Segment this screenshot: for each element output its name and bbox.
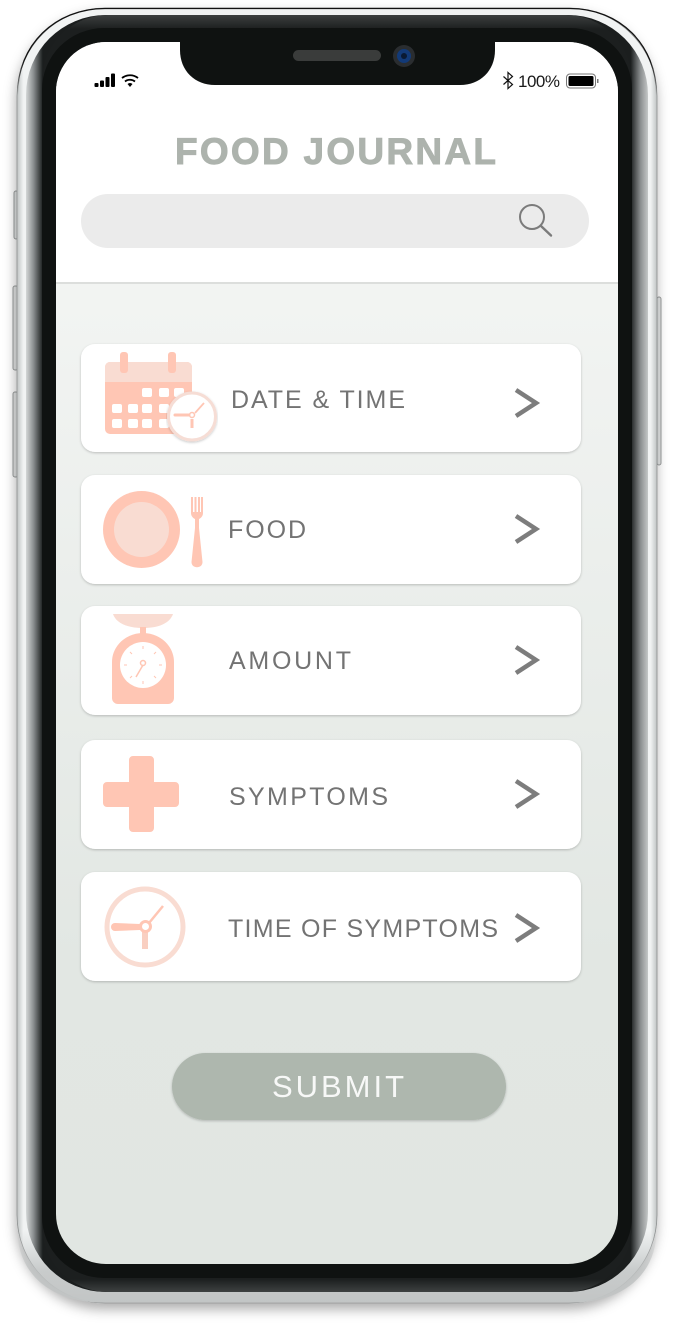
- submit button: SUBMIT: [272, 1069, 404, 1104]
- card: time of symptoms: [81, 872, 581, 981]
- label: FOOD: [228, 516, 306, 544]
- submit button: [172, 1053, 506, 1120]
- arrow: [516, 647, 536, 673]
- status bar right: bluetooth, battery: 100%: [518, 72, 560, 91]
- icon: plate and fork: [103, 491, 203, 568]
- arrow: [516, 781, 536, 807]
- arrow: [516, 516, 536, 542]
- arrow: [516, 390, 536, 416]
- icon: clock: [107, 889, 183, 965]
- icon: kitchen scale: [112, 614, 174, 704]
- notch: [180, 42, 495, 85]
- arrow: [516, 915, 536, 941]
- status bar left: signal and wifi: [94, 74, 138, 87]
- card: amount: [81, 606, 581, 715]
- card: food: [81, 475, 581, 584]
- card: symptoms: [81, 740, 581, 849]
- card: date and time: [81, 344, 581, 452]
- side buttons: [13, 191, 661, 477]
- icon: calendar with clock: [105, 352, 216, 440]
- title: FOOD JOURNAL: [175, 131, 496, 172]
- label: DATE & TIME: [231, 386, 405, 414]
- camera: [393, 45, 415, 67]
- label: TIME OF SYMPTOMS: [228, 915, 498, 943]
- label: SYMPTOMS: [229, 783, 388, 811]
- screen: [56, 42, 618, 1264]
- icon: magnifier: [520, 205, 551, 236]
- search bar: [81, 194, 589, 248]
- label: AMOUNT: [229, 647, 351, 675]
- status bar right: bluetooth, battery: [504, 72, 598, 91]
- icon: medical cross: [103, 756, 179, 832]
- header panel: [56, 42, 618, 283]
- speaker: [293, 50, 381, 61]
